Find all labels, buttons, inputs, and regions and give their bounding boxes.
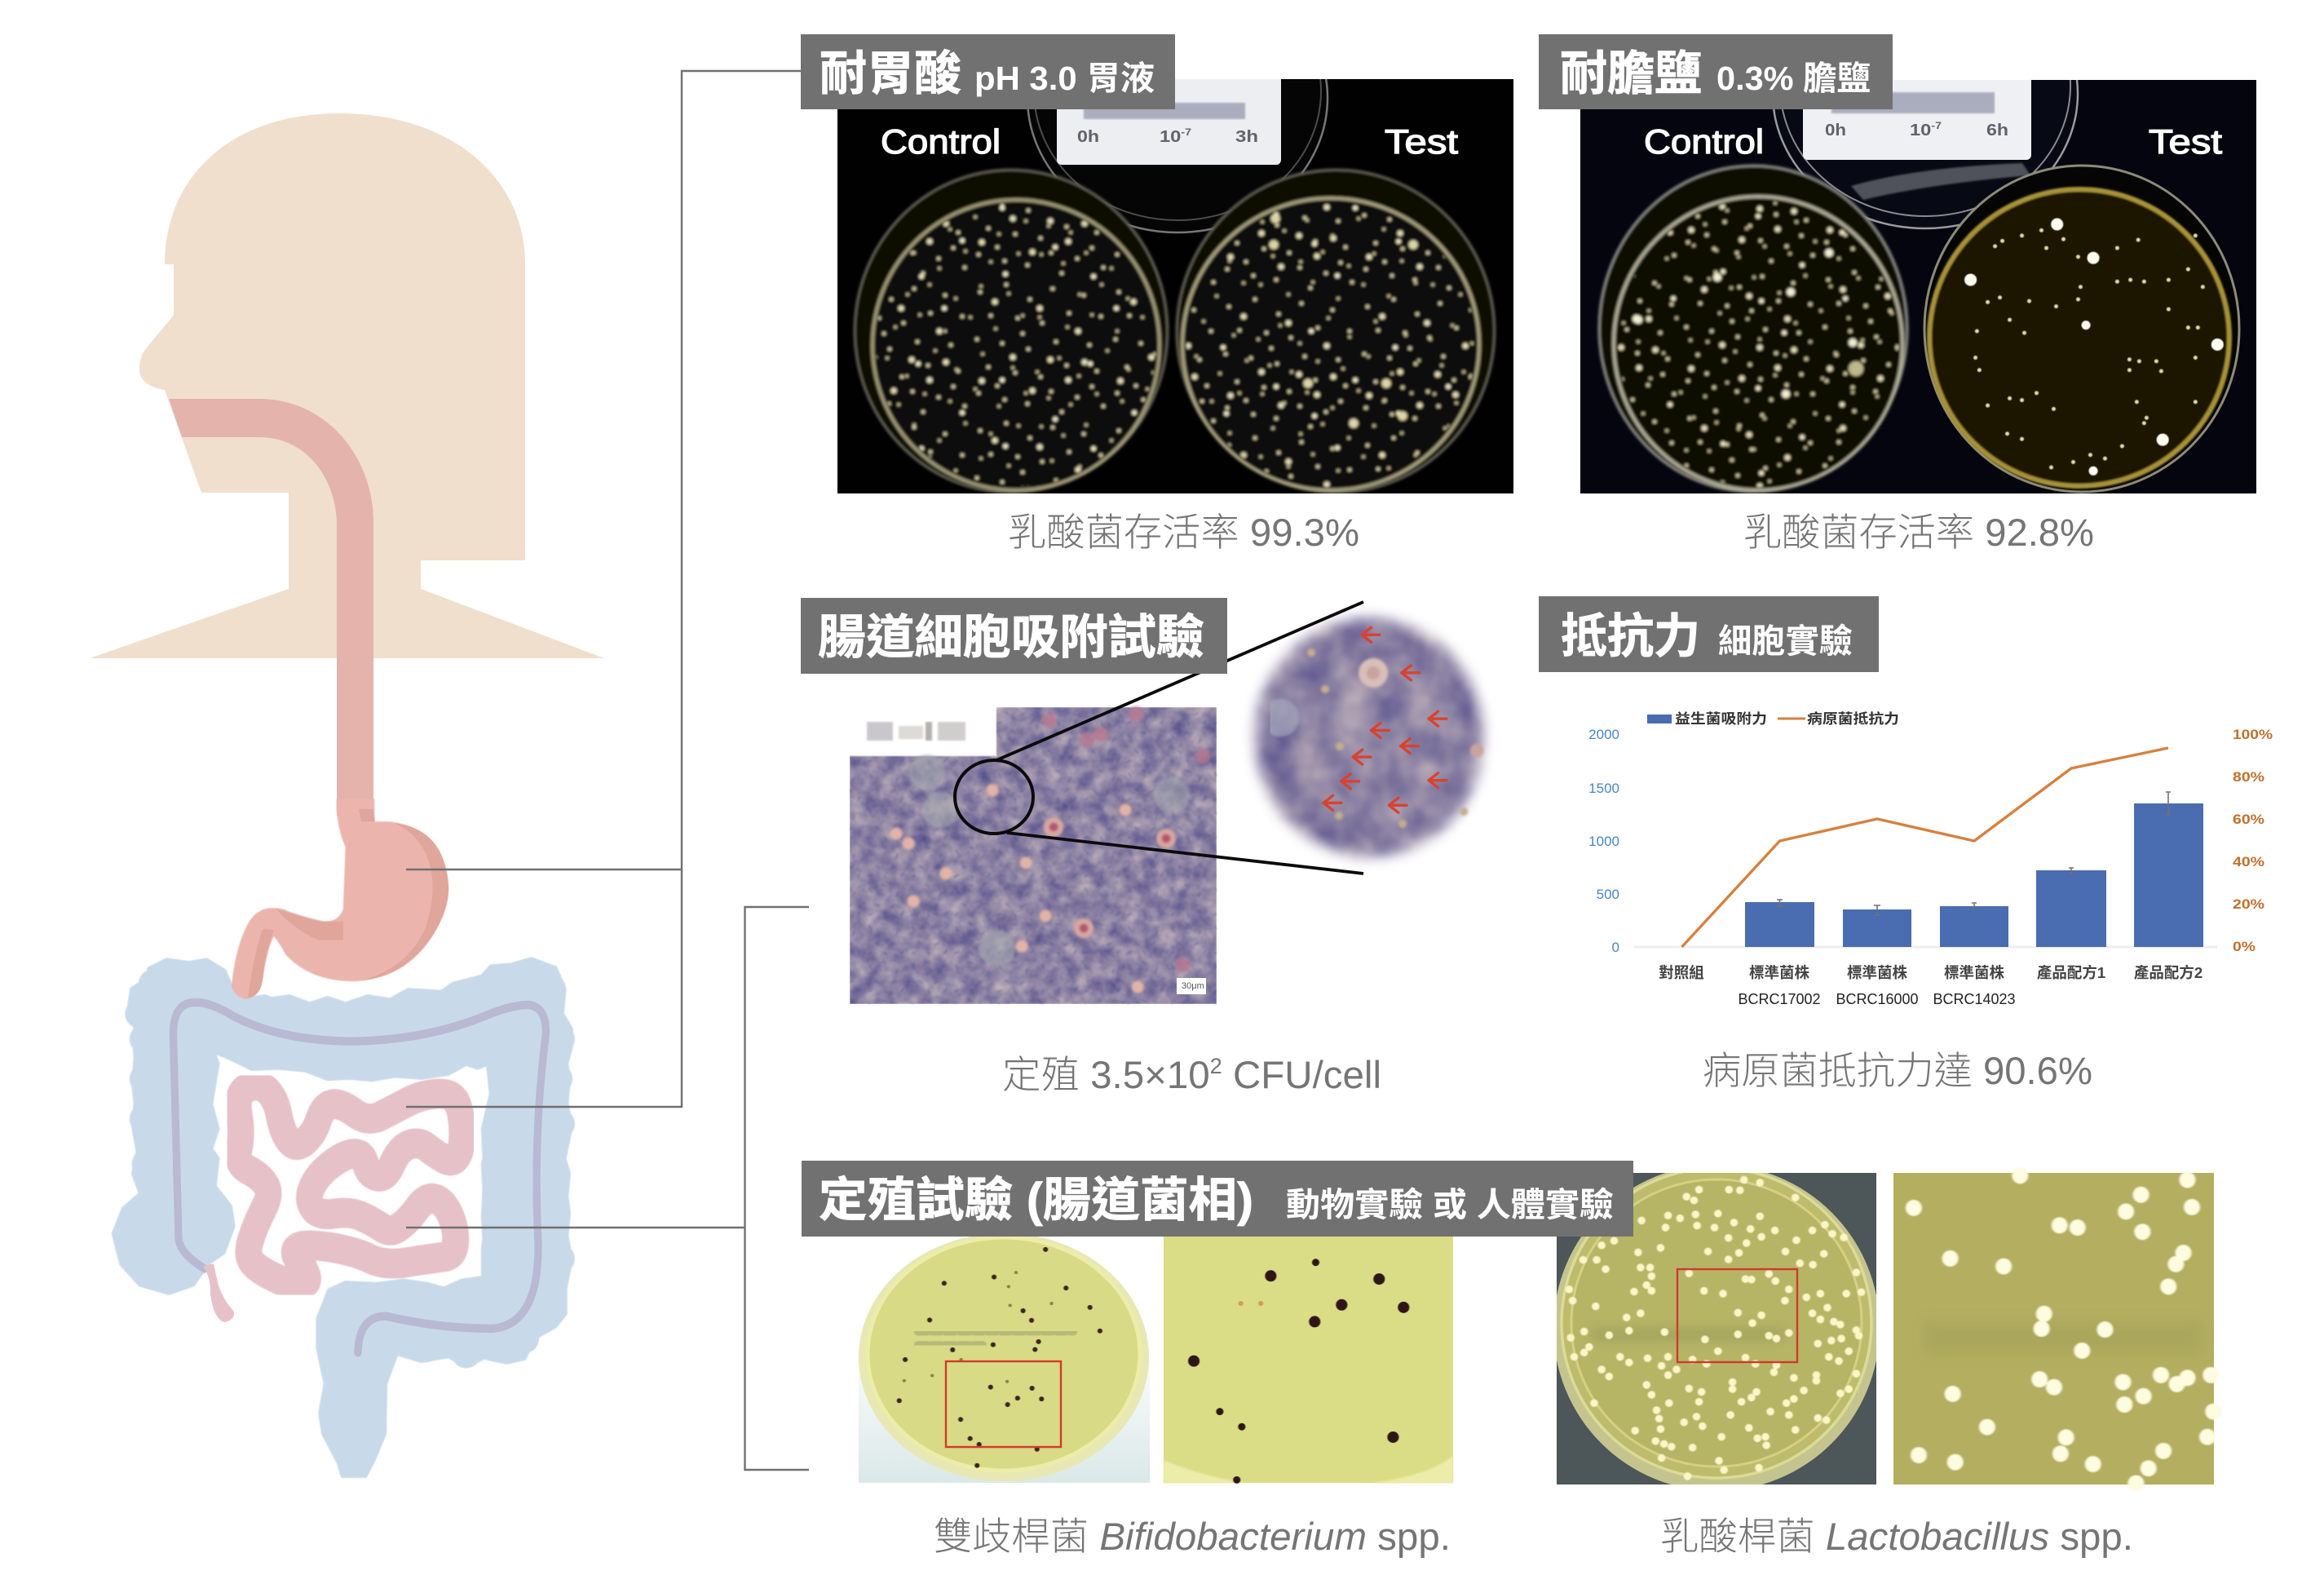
colonies	[1971, 224, 2217, 471]
heading: colonization test	[802, 1161, 1633, 1237]
red selection box	[946, 1361, 1061, 1447]
red arrows	[1323, 627, 1447, 812]
printed plate text	[917, 1332, 1073, 1345]
test plate	[1177, 170, 1495, 493]
right axis: 40%	[2233, 854, 2264, 869]
right axis	[2233, 727, 2273, 954]
category labels	[1659, 964, 2202, 1007]
blurred sample label	[867, 722, 965, 741]
right axis: 60%	[2233, 812, 2264, 827]
appendix	[203, 1263, 234, 1322]
legend	[1647, 710, 1899, 727]
caption: survival 92.8%: 乳酸菌存活率 92.8%	[1743, 511, 2094, 554]
reference dish and label: 0h	[1077, 128, 1099, 146]
colonies	[1914, 1175, 2213, 1483]
reference dish and label: 10	[1160, 128, 1177, 146]
connector lines	[406, 71, 809, 1470]
heading: colonization test: 動物實驗 或 人體實驗	[1286, 1186, 1614, 1223]
reference dish and label	[1773, 80, 2079, 230]
caption: colonization: 定殖 3.5×10	[1002, 1053, 1208, 1096]
stomach	[232, 799, 448, 999]
colon inner line	[173, 1002, 546, 1352]
magnified view	[1255, 618, 1483, 856]
panel: pathogen resistance	[1539, 596, 2273, 1092]
heading: bile salt: 耐膽鹽	[1560, 47, 1702, 100]
caption: Lactobacillus: 乳酸桿菌 Lactobacillus spp.	[1660, 1515, 2133, 1558]
reference dish and label: 0h	[1825, 122, 1846, 139]
left axis: 2000	[1588, 727, 1619, 742]
colonies	[1194, 1263, 1403, 1480]
caption: Bifidobacterium: 雙歧桿菌 Bifidobacterium spp.	[934, 1515, 1451, 1558]
right axis: 80%	[2233, 769, 2264, 785]
photo: Lactobacillus close-up	[1893, 1173, 2214, 1484]
caption: resistance 90.6%: 病原菌抵抗力達 90.6%	[1703, 1049, 2092, 1092]
red selection box	[1677, 1269, 1797, 1362]
large intestine	[113, 959, 572, 1476]
legend: 益生菌吸附力	[1675, 711, 1767, 727]
heading: gastric acid: 耐胃酸	[820, 47, 961, 100]
heading: resistance: 抵抗力	[1561, 610, 1700, 663]
reference dish and label: -7	[1181, 126, 1191, 138]
heading: cell adhesion	[801, 598, 1227, 674]
right axis: 0%	[2233, 939, 2256, 954]
panel: gastric acid tolerance	[801, 0, 1513, 554]
photo: bile salt plates	[1580, 80, 2256, 493]
category labels: BCRC14023	[1933, 991, 2016, 1007]
reference dish and label: 10	[1910, 122, 1928, 139]
category labels: 產品配方1	[2037, 964, 2105, 981]
test plate	[1924, 166, 2239, 492]
heading: resistance	[1539, 596, 1879, 672]
resistance line	[1681, 748, 2168, 947]
zoom callout lines	[955, 602, 1363, 874]
label: Control: Control	[1644, 122, 1764, 161]
panel: intestinal cell adhesion	[801, 598, 1483, 1096]
panel: bile salt tolerance	[1539, 0, 2256, 554]
scale bar: 30μm	[1182, 981, 1204, 991]
category labels: 對照組	[1659, 964, 1704, 981]
category labels: 產品配方2	[2134, 964, 2202, 981]
category labels: BCRC16000	[1836, 991, 1919, 1007]
scale bar	[1177, 978, 1206, 994]
esophagus	[169, 399, 373, 816]
photo: gastric acid plates	[837, 79, 1513, 493]
reference dish and label	[1027, 79, 1329, 233]
error bars	[1777, 792, 2171, 915]
micrograph	[850, 707, 1217, 1004]
heading: colonization test: 定殖試驗 (腸道菌相)	[819, 1174, 1253, 1227]
caption: colonization: CFU/cell	[1222, 1053, 1381, 1096]
reference dish and label: -7	[1931, 120, 1942, 131]
right axis: 100%	[2233, 727, 2273, 742]
photo: Bifidobacterium plate	[859, 1223, 1150, 1483]
illustration: human digestive tract	[90, 113, 604, 1476]
category labels: BCRC17002	[1738, 991, 1821, 1007]
stomach shading	[248, 809, 448, 998]
category labels: 標準菌株	[1944, 964, 2004, 981]
photo: Bifidobacterium close-up	[1164, 1237, 1453, 1483]
colonies	[1569, 1179, 1862, 1476]
left axis: 1500	[1588, 781, 1619, 796]
head silhouette	[90, 113, 604, 658]
small intestine	[238, 1086, 462, 1285]
caption: survival 99.3%: 乳酸菌存活率 99.3%	[1008, 511, 1359, 554]
category labels: 標準菌株	[1749, 964, 1809, 981]
caption: colonization: 2	[1210, 1054, 1222, 1078]
reference dish and label: 6h	[1986, 122, 2008, 139]
label: Test: Test	[1385, 122, 1458, 161]
control plate	[855, 170, 1168, 493]
combo chart	[1588, 710, 2273, 1007]
legend: 病原菌抵抗力	[1807, 710, 1899, 727]
label: Control: Control	[881, 122, 1001, 161]
left axis: 1000	[1588, 834, 1619, 849]
control plate	[1599, 166, 1907, 492]
label: Test: Test	[2149, 122, 2222, 161]
heading: gastric acid	[801, 34, 1175, 109]
stained cells	[896, 714, 1203, 987]
colonies	[899, 1250, 1100, 1466]
right axis: 20%	[2233, 896, 2264, 912]
digestive organs	[113, 799, 572, 1476]
heading: bile salt	[1539, 34, 1893, 109]
photo: Lactobacillus plate	[1553, 1165, 1880, 1491]
bars	[1745, 803, 2203, 947]
heading: bile salt: 0.3% 膽鹽	[1716, 60, 1871, 97]
heading: resistance: 細胞實驗	[1718, 622, 1853, 660]
left axis: 500	[1597, 887, 1619, 902]
left axis: 0	[1612, 940, 1619, 955]
heading: cell adhesion: 腸道細胞吸附試驗	[818, 611, 1204, 664]
left axis	[1588, 727, 1619, 955]
heading: gastric acid: pH 3.0 胃液	[974, 60, 1155, 97]
panel: colonization test	[802, 1161, 2214, 1558]
reference dish and label: 3h	[1235, 128, 1258, 146]
category labels: 標準菌株	[1847, 964, 1907, 981]
